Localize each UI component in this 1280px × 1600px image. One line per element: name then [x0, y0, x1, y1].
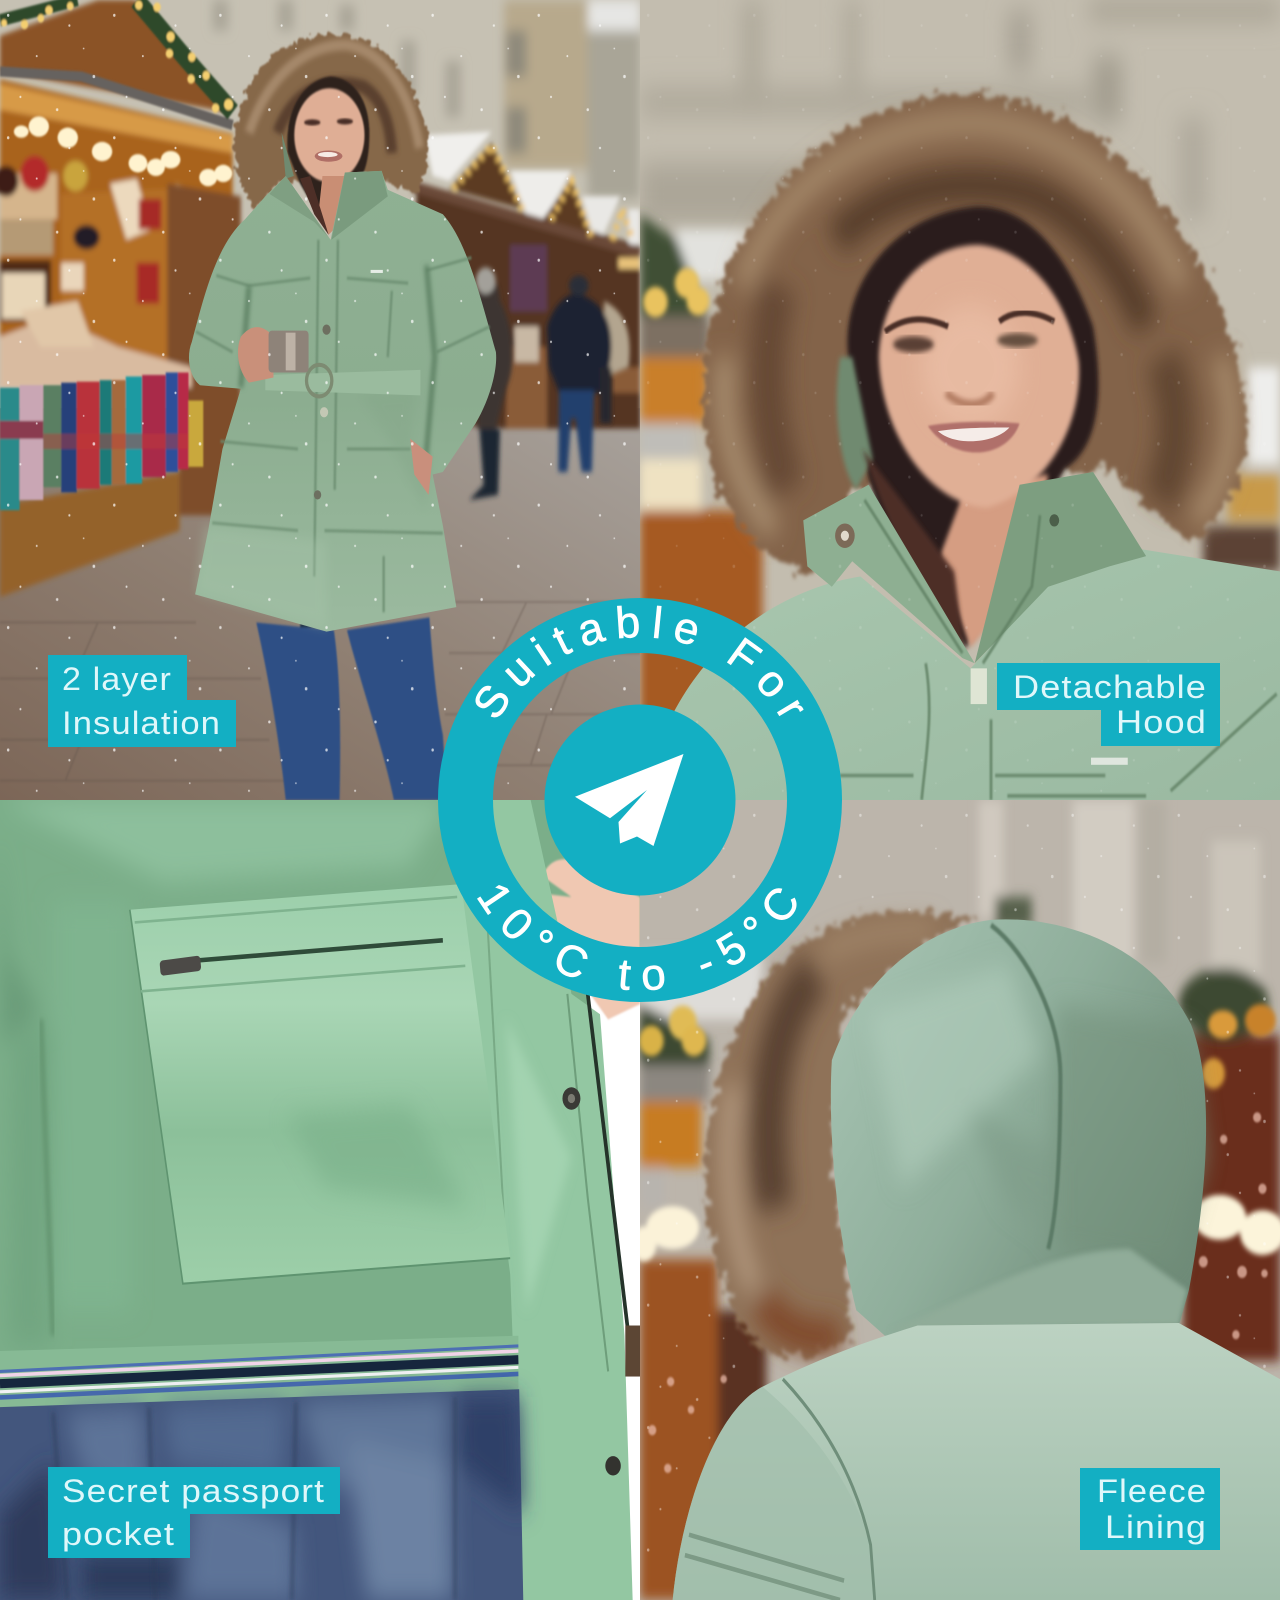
hood — [831, 919, 1207, 1336]
badge: suitable temperature range — [438, 598, 842, 1002]
face — [879, 245, 1079, 648]
label: Fleece Lining — [1080, 1468, 1220, 1550]
label: 2 layer Insulation: 2 layer — [62, 661, 172, 697]
hair — [847, 207, 1098, 648]
label: Secret passport pocket: pocket — [62, 1516, 175, 1552]
label: Detachable Hood: Hood — [1116, 704, 1207, 740]
woman: fur hood — [234, 34, 428, 209]
panel: hood close-up with detachable hood — [640, 0, 1280, 800]
label: Secret passport pocket: Secret passport — [62, 1473, 325, 1509]
photo: woman from behind showing hood — [640, 800, 1280, 1600]
curved text: Suitable For: Suitable For — [476, 606, 804, 718]
panel: inside lining with secret passport pocket — [0, 800, 640, 1600]
label: Fleece Lining: Fleece — [1097, 1473, 1207, 1509]
label: Detachable Hood — [997, 663, 1220, 746]
pocket with zipper — [130, 884, 510, 1284]
icon: steel mug held in hand — [238, 327, 309, 383]
label: 2 layer Insulation: Insulation — [62, 705, 221, 741]
fur hood trim — [704, 94, 1247, 577]
scarves on the stall — [0, 372, 203, 510]
striped elastic waistband — [0, 1336, 518, 1407]
panel: back of hood with fleece lining — [632, 800, 1280, 1600]
jacket front placket — [445, 800, 640, 1600]
woman: parka — [189, 171, 496, 632]
label: 2 layer Insulation — [48, 655, 236, 747]
back and shoulder of parka — [673, 1323, 1280, 1600]
woman: jeans — [256, 566, 447, 800]
panel: full-length view with 2 layer insulation — [0, 0, 640, 800]
badge ring — [466, 626, 814, 974]
market stall on the left — [0, 0, 241, 597]
photo: face and fur-trimmed hood close-up — [640, 0, 1280, 800]
fur trim — [705, 911, 975, 1355]
right white background and hand — [535, 859, 640, 1600]
curved text: 10°C to -5°C: 10°C to -5°C — [477, 885, 796, 990]
navy quilted lining — [0, 1389, 523, 1600]
label: Secret passport pocket — [48, 1467, 340, 1558]
photo: woman in green parka at a Christmas market — [0, 0, 640, 800]
parka collar and shoulders — [673, 472, 1280, 800]
label: Detachable Hood: Detachable — [1013, 669, 1207, 705]
woman: hair and face — [282, 77, 369, 235]
photo: fleece interior with zipped pocket — [0, 800, 640, 1600]
label: Fleece Lining: Lining — [1105, 1509, 1207, 1545]
icon: paper plane in centre circle — [544, 704, 736, 896]
hair strand — [862, 449, 964, 651]
